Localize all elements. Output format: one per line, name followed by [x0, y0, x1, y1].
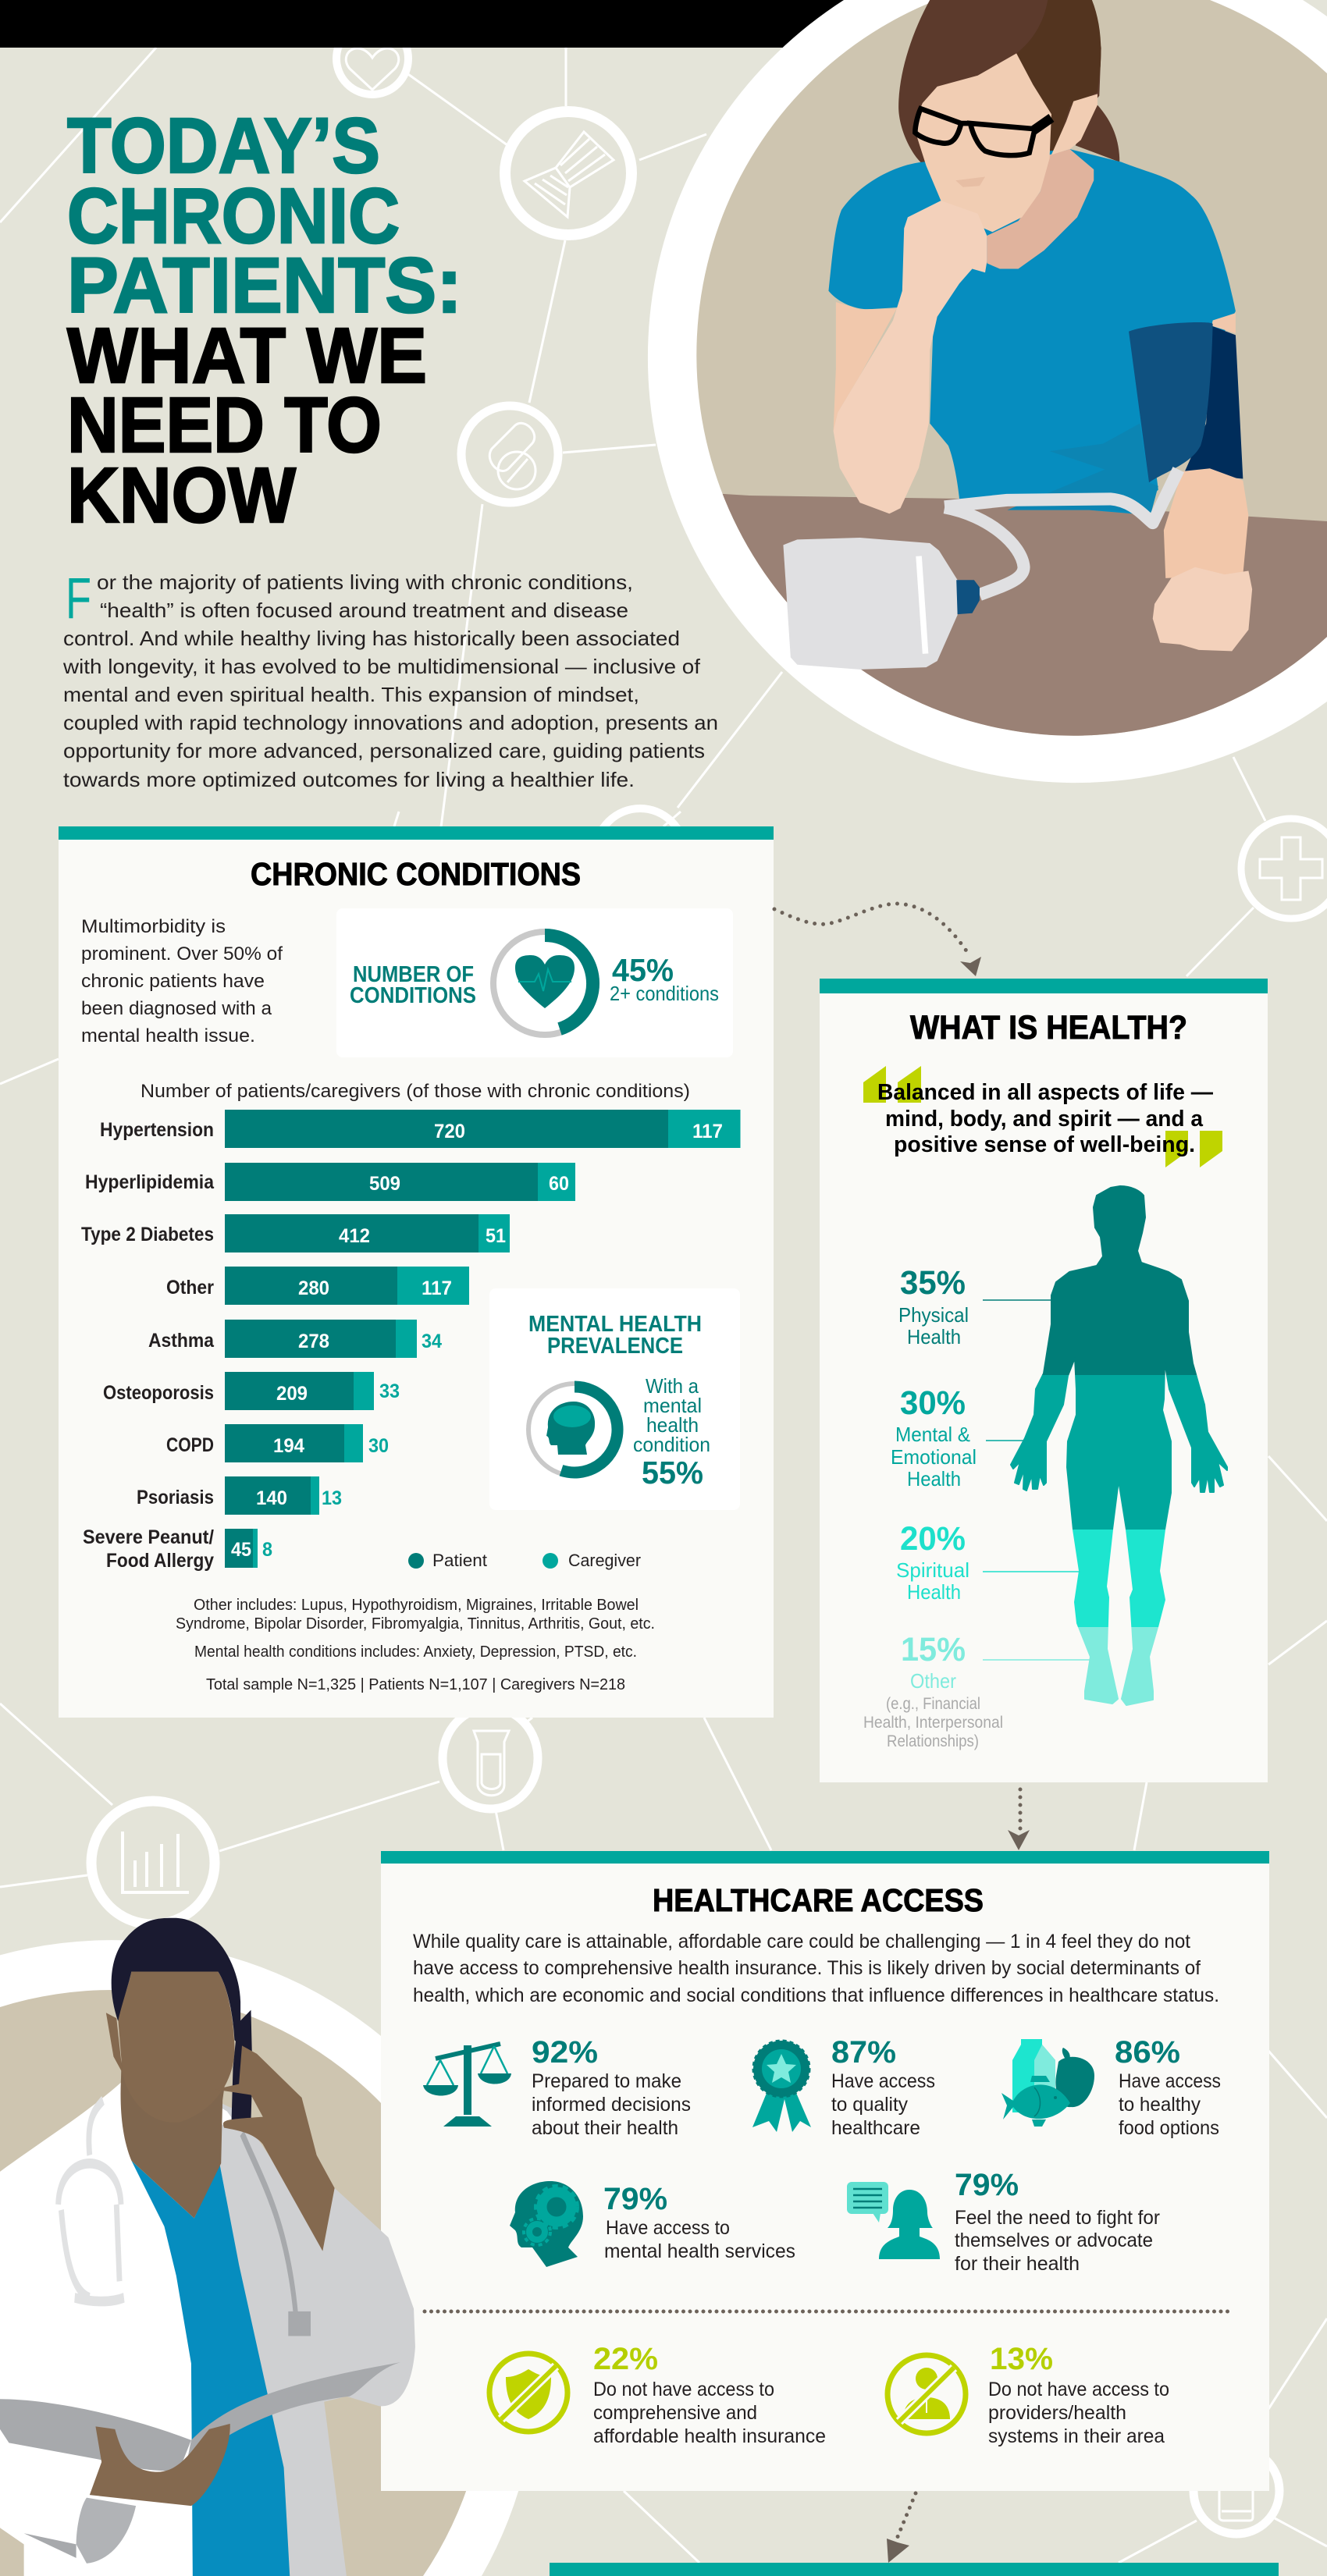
label: mental and emotional health: Health	[907, 1467, 961, 1491]
label: mental and emotional health: 30%	[900, 1384, 966, 1422]
stat: healthy food: food options	[1119, 2117, 1219, 2139]
title: KNOW	[67, 452, 297, 539]
footnotes: Other includes: Lupus, Hypothyroidism, Migraines, Irritable Bowel	[194, 1597, 639, 1614]
number of conditions callout: CONDITIONS	[350, 983, 476, 1008]
bar values: 8	[262, 1539, 272, 1561]
bar values: 140	[256, 1487, 287, 1509]
stat: self advocacy: themselves or advocate	[955, 2230, 1153, 2251]
bar labels: Psoriasis	[137, 1487, 214, 1508]
stat: informed decisions: informed decisions	[532, 2094, 691, 2116]
legend: Caregiver	[568, 1551, 641, 1570]
arrow: what is health to healthcare access	[1008, 1789, 1030, 1850]
title: NEED TO	[67, 382, 382, 469]
label: physical health: 35%	[900, 1264, 966, 1302]
number of conditions callout: 2+ conditions	[610, 982, 719, 1005]
bar values: 51	[486, 1225, 506, 1247]
icon node: medical cross	[1241, 819, 1327, 918]
label: mental and emotional health: Emotional	[891, 1445, 977, 1469]
icon node: hidden behind chronic conditions panel	[596, 808, 685, 897]
bar values: 34	[422, 1331, 442, 1352]
bar values: 117	[692, 1121, 723, 1142]
stat: no providers: providers/health	[988, 2402, 1126, 2424]
quote marks	[863, 1066, 1222, 1167]
intro text: have access to comprehensive health insurance. This is likely driven by social determinants of	[413, 1957, 1201, 1979]
bar labels: Osteoporosis	[103, 1382, 214, 1404]
woman figure	[783, 0, 1252, 670]
legend	[408, 1551, 641, 1570]
stat: informed decisions: 92%	[532, 2035, 598, 2070]
stat: no providers	[888, 2342, 1169, 2447]
mental health prevalence callout: PREVALENCE	[547, 1334, 683, 1359]
label: other: Health, Interpersonal	[863, 1714, 1003, 1732]
stat: mental health services: Have access to	[606, 2217, 730, 2239]
multimorbidity text: Multimorbidity is	[81, 916, 226, 937]
icon: head with gears	[510, 2181, 583, 2267]
bar labels	[81, 1119, 215, 1572]
quote text: positive sense of well-being.	[894, 1132, 1195, 1157]
body silhouette	[1011, 1186, 1227, 1705]
icon node: DNA	[505, 112, 631, 235]
title: PATIENTS:	[67, 242, 462, 329]
icon: person with speech bubble	[847, 2182, 940, 2259]
bar labels: Asthma	[148, 1330, 215, 1352]
stat: informed decisions: Prepared to make	[532, 2070, 681, 2092]
intro paragraph: “health” is often focused around treatment and disease	[100, 599, 628, 622]
bar values: 509	[369, 1173, 400, 1195]
mental health prevalence callout	[489, 1288, 740, 1510]
bar labels: Hypertension	[100, 1119, 214, 1141]
icon: crossed shield	[489, 2354, 567, 2432]
top black bar	[0, 0, 859, 48]
intro text: health, which are economic and social conditions that influence differences in healthcare status.	[413, 1984, 1219, 2006]
stat: no insurance: comprehensive and	[593, 2402, 757, 2424]
title: WHAT WE	[67, 312, 427, 400]
number of conditions callout: NUMBER OF	[353, 962, 474, 987]
intro paragraph: coupled with rapid technology innovations and adoption, presents an	[63, 711, 718, 734]
stat: informed decisions: about their health	[532, 2117, 678, 2139]
bar labels: Type 2 Diabetes	[81, 1224, 214, 1245]
icon: award ribbon	[752, 2041, 811, 2132]
bar values: 117	[422, 1277, 452, 1299]
bar labels: Severe Peanut/	[83, 1526, 214, 1548]
bar values: 194	[273, 1435, 304, 1457]
stat: healthy food	[1001, 2035, 1221, 2139]
stat: no providers: systems in their area	[988, 2425, 1165, 2447]
bar labels: Hyperlipidemia	[85, 1171, 215, 1193]
icon node: bar chart	[91, 1801, 215, 1924]
stat: quality healthcare: 87%	[831, 2035, 896, 2070]
label: mental and emotional health	[891, 1384, 1024, 1491]
stat: no providers: Do not have access to	[988, 2379, 1169, 2400]
intro text	[413, 1931, 1219, 2006]
label: mental and emotional health: Mental &	[895, 1423, 970, 1446]
next panel top edge	[550, 2563, 1279, 2576]
donut 45%	[493, 932, 596, 1035]
bar values: 280	[298, 1277, 329, 1299]
multimorbidity text: mental health issue.	[81, 1025, 255, 1046]
stat: mental health services: mental health services	[604, 2240, 795, 2262]
intro paragraph	[62, 566, 718, 791]
white ring	[648, 0, 1327, 783]
bar values: 209	[276, 1383, 308, 1405]
icon node: flask	[443, 1707, 538, 1809]
stat: self advocacy	[847, 2168, 1160, 2275]
bar labels: Food Allergy	[106, 1550, 214, 1572]
label: other: Other	[910, 1669, 956, 1693]
label: spiritual health	[896, 1520, 1080, 1604]
mental health prevalence callout: 55%	[642, 1455, 703, 1491]
icon node: phone	[1194, 2448, 1279, 2534]
quote text: mind, body, and spirit — and a	[885, 1107, 1204, 1132]
label: physical health	[898, 1264, 1051, 1348]
bar labels: Other	[166, 1277, 214, 1299]
label: spiritual health: Health	[907, 1580, 961, 1604]
mental health prevalence callout: condition	[633, 1433, 710, 1456]
heading: WHAT IS HEALTH?	[910, 1009, 1187, 1046]
intro paragraph: towards more optimized outcomes for living a healthier life.	[63, 768, 635, 791]
stat: healthy food: 86%	[1115, 2035, 1180, 2070]
bar values: 45	[231, 1539, 251, 1561]
illustration: doctor on the phone	[0, 1918, 415, 2576]
icon node: pills	[461, 406, 558, 503]
label: other: (e.g., Financial	[886, 1695, 980, 1713]
multimorbidity text	[81, 916, 283, 1046]
stat: no insurance: 22%	[593, 2342, 658, 2376]
stat: self advocacy: Feel the need to fight for	[955, 2207, 1160, 2229]
stat: mental health services: 79%	[603, 2182, 667, 2216]
mental health prevalence callout: health	[646, 1413, 699, 1437]
intro paragraph: with longevity, it has evolved to be multidimensional — inclusive of	[62, 655, 701, 678]
mental health prevalence callout: mental	[643, 1394, 702, 1417]
label: other: 15%	[901, 1631, 966, 1668]
bar values: 33	[379, 1380, 400, 1402]
arrow: chronic conditions to what is health	[774, 904, 981, 976]
stat: mental health services	[510, 2181, 795, 2267]
label: physical health: Health	[907, 1325, 961, 1348]
stat: informed decisions	[423, 2035, 691, 2139]
icon: scales	[423, 2044, 511, 2127]
mental health prevalence callout: MENTAL HEALTH	[528, 1312, 702, 1337]
panel: what is health	[820, 979, 1268, 1782]
multimorbidity text: been diagnosed with a	[81, 998, 272, 1019]
stat: healthy food: Have access	[1119, 2070, 1221, 2092]
bar values: 13	[322, 1487, 342, 1509]
stat: quality healthcare: to quality	[831, 2094, 908, 2116]
icon node: heart	[336, 23, 408, 94]
bar values: 278	[298, 1331, 329, 1352]
stat: quality healthcare: Have access	[831, 2070, 935, 2092]
quote text: Balanced in all aspects of life —	[877, 1080, 1213, 1105]
bar chart: conditions	[81, 1110, 740, 1572]
label: spiritual health: Spiritual	[896, 1558, 969, 1582]
intro paragraph: opportunity for more advanced, personalized care, guiding patients	[63, 739, 705, 762]
illustration: patient measuring blood pressure	[648, 0, 1327, 783]
label: spiritual health: 20%	[900, 1520, 966, 1558]
multimorbidity text: chronic patients have	[81, 971, 265, 992]
multimorbidity text: prominent. Over 50% of	[81, 943, 283, 965]
stat: healthy food: to healthy	[1119, 2094, 1201, 2116]
mental health prevalence callout: With a	[646, 1374, 699, 1398]
intro paragraph: F	[66, 566, 91, 631]
intro paragraph: mental and even spiritual health. This expansion of mindset,	[63, 683, 639, 706]
panel: healthcare access	[381, 1851, 1269, 2491]
arrow: healthcare access to next panel	[887, 2493, 916, 2563]
patient bars	[225, 1110, 668, 1568]
bar values: 60	[549, 1173, 569, 1195]
title	[67, 102, 462, 539]
label: other: Relationships)	[887, 1732, 979, 1750]
bar values: 720	[434, 1121, 465, 1142]
bar values	[231, 1121, 723, 1561]
label: other	[863, 1631, 1090, 1750]
footnotes	[176, 1597, 655, 1693]
quote text	[877, 1080, 1213, 1157]
bar labels: COPD	[166, 1434, 214, 1456]
stat: self advocacy: 79%	[955, 2168, 1019, 2202]
panel: chronic conditions	[59, 826, 774, 1718]
title: CHRONIC	[67, 172, 400, 260]
heading: HEALTHCARE ACCESS	[653, 1882, 984, 1918]
stat: self advocacy: for their health	[955, 2253, 1080, 2275]
stat: quality healthcare: healthcare	[831, 2117, 920, 2139]
footnotes: Total sample N=1,325 | Patients N=1,107 | Caregivers N=218	[206, 1676, 625, 1693]
stat: no insurance: affordable health insurance	[593, 2425, 826, 2447]
title: TODAY’S	[67, 102, 380, 190]
donut 55% with head	[528, 1384, 621, 1476]
stat: no providers: 13%	[990, 2342, 1053, 2376]
stat: no insurance: Do not have access to	[593, 2379, 774, 2400]
intro paragraph: or the majority of patients living with chronic conditions,	[97, 570, 633, 594]
footnotes: Mental health conditions includes: Anxiety, Depression, PTSD, etc.	[194, 1643, 637, 1661]
bar values: 412	[339, 1225, 370, 1247]
number of conditions callout: 45%	[612, 952, 674, 988]
stat: no insurance	[489, 2342, 826, 2447]
chart caption: Number of patients/caregivers (of those with chronic conditions)	[141, 1081, 690, 1102]
heading: CHRONIC CONDITIONS	[251, 856, 581, 892]
icon: crossed doctor	[888, 2355, 966, 2433]
intro paragraph: control. And while healthy living has historically been associated	[63, 627, 680, 650]
illustration backdrop: doctor circle	[0, 1940, 537, 2576]
caregiver bars	[253, 1110, 740, 1568]
label: physical health: Physical	[898, 1303, 969, 1327]
beige circle	[696, 0, 1327, 736]
icon: milk, apple and fish	[1001, 2039, 1094, 2127]
table	[723, 493, 1327, 736]
legend: Patient	[432, 1551, 487, 1570]
footnotes: Syndrome, Bipolar Disorder, Fibromyalgia, Tinnitus, Arthritis, Gout, etc.	[176, 1615, 655, 1633]
bar values: 30	[368, 1435, 389, 1457]
stat: quality healthcare	[752, 2035, 935, 2139]
intro text: While quality care is attainable, affordable care could be challenging — 1 in 4 feel they do not	[413, 1931, 1190, 1952]
number of conditions callout	[336, 908, 733, 1057]
